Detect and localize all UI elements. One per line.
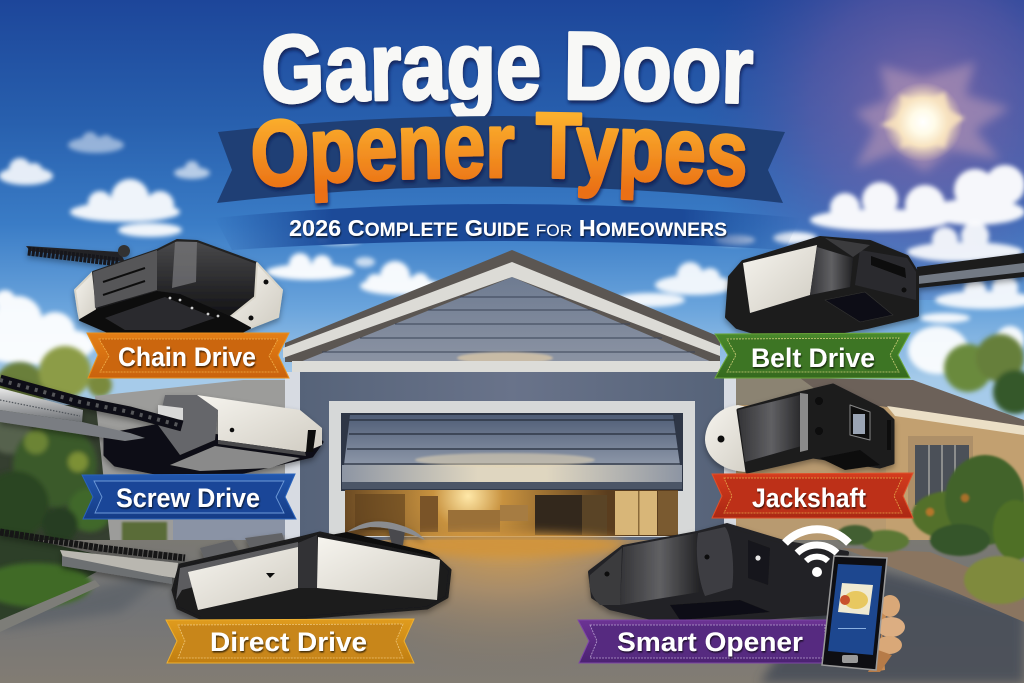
label: Direct Drive: Direct Drive <box>210 627 367 657</box>
trees right <box>944 334 1024 414</box>
left grass and bush <box>0 532 100 632</box>
label: Jackshaft: Jackshaft <box>752 483 866 513</box>
clouds <box>0 132 1024 374</box>
garage door frame <box>329 401 695 537</box>
hand holding phone <box>868 595 905 672</box>
opener: smart opener <box>589 525 847 620</box>
main house gable <box>283 250 720 364</box>
icon: wifi <box>785 529 849 577</box>
subtitle: 2026 COMPLETE GUIDE FOR HOMEOWNERS <box>289 215 727 241</box>
label: Screw Drive <box>82 474 296 519</box>
left and right pillars <box>285 372 736 542</box>
label: Chain Drive: Chain Drive <box>118 342 256 372</box>
opener: direct drive <box>0 521 450 618</box>
house right wing <box>736 378 1024 545</box>
sun with purple haze <box>660 0 1024 300</box>
label: Chain Drive <box>87 333 289 378</box>
label: Smart Opener: Smart Opener <box>617 627 804 657</box>
label: Direct Drive <box>166 619 414 663</box>
opener: screw drive <box>0 380 322 476</box>
garage wall <box>300 372 724 540</box>
label: Screw Drive: Screw Drive <box>116 483 260 513</box>
subtitle band <box>215 204 800 250</box>
white trim band <box>292 361 720 372</box>
phone with app <box>822 556 887 670</box>
banner: navy ribbon <box>217 116 785 203</box>
right shrubs <box>837 455 1024 604</box>
trees left <box>0 346 112 555</box>
garage door <box>341 413 683 491</box>
label: Smart Opener <box>578 620 827 663</box>
opener: chain drive <box>26 240 282 333</box>
title: Garage Door: Garage Door <box>262 31 756 116</box>
label: Belt Drive <box>715 333 910 378</box>
title: Opener Types: Opener Types <box>252 112 748 208</box>
glow on driveway <box>385 533 625 557</box>
opener: belt drive <box>727 238 1024 333</box>
opener: jackshaft <box>705 385 893 472</box>
lit garage interior <box>345 490 678 536</box>
label: Jackshaft <box>712 473 913 518</box>
ground driveway <box>0 535 1024 683</box>
house left wing <box>95 380 290 542</box>
label: Belt Drive: Belt Drive <box>751 343 875 373</box>
